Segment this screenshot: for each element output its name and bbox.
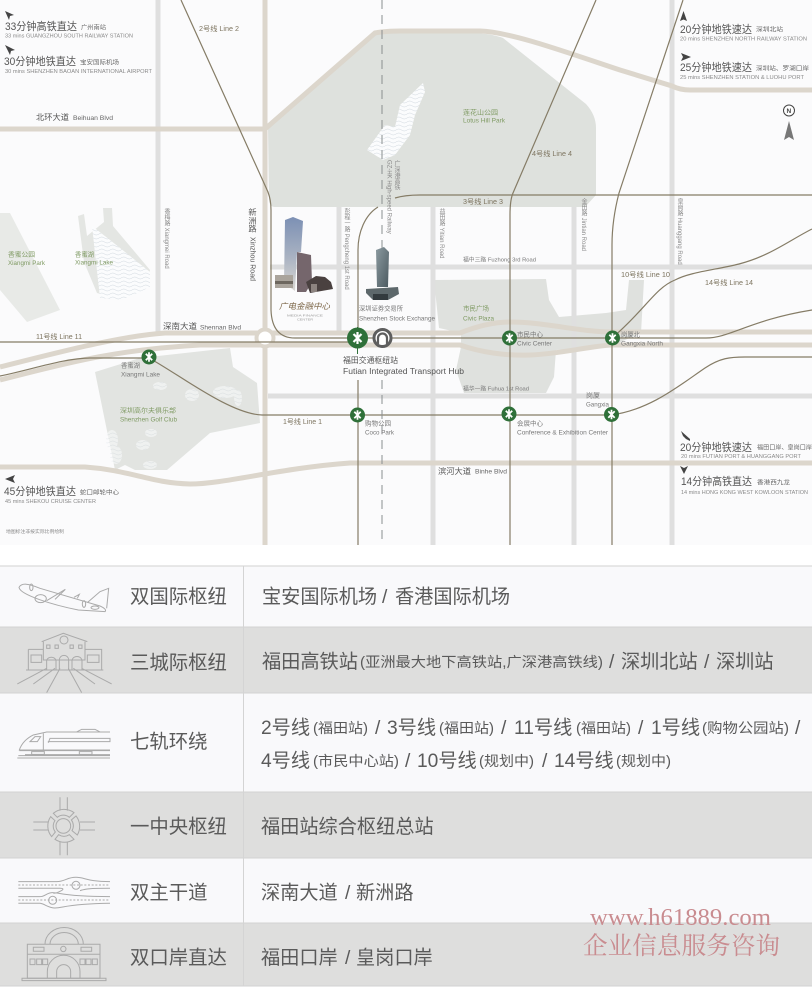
row value: metro lines: 10号线	[417, 750, 477, 772]
station labels	[121, 304, 664, 436]
park: Shenzhen Golf Club	[95, 348, 260, 470]
icon: port building	[22, 927, 106, 981]
water: Lotus Hill	[367, 83, 425, 160]
callout: Futian and Huanggang ports: 福田口岸、皇岗口岸	[757, 444, 812, 452]
callout: Hong Kong West Kowloon: 香港西九龙	[757, 478, 790, 486]
station labels: 市民中心	[517, 330, 544, 338]
row value: airports: 香港国际机场	[395, 586, 510, 608]
callout: Shenzhen North: 20分钟地铁速达	[680, 23, 752, 36]
station labels: Coco Park	[365, 430, 395, 436]
vertical road labels: 皇岗路 Huanggang Road	[676, 197, 683, 265]
road labels: 福中三路 Fuzhong 3rd Road	[463, 256, 536, 264]
hub label	[343, 355, 465, 376]
metro line labels: 1号线 Line 1	[283, 417, 322, 426]
water: Xiangmi Lake	[92, 226, 150, 300]
building label: Media Finance Center	[279, 302, 331, 322]
callout: Guangzhou South: 广州南站	[81, 24, 106, 32]
row value: metro lines: 3号线	[387, 717, 436, 739]
row label: three intercity hubs: 三城际枢纽	[130, 652, 227, 674]
high-speed railway dashed line	[381, 0, 383, 545]
callout: Guangzhou South: 33 mins GUANGZHOU SOUTH RAILWAY STATION	[5, 34, 133, 40]
row value: rail stations: 福田高铁站	[262, 651, 358, 673]
callout: Futian and Huanggang ports: 20 mins FUTIAN PORT & HUANGGANG PORT	[681, 454, 802, 460]
row value: metro lines: 2号线	[261, 717, 310, 739]
icon: railway station	[17, 633, 112, 693]
map disclaimer: 地图标注非按实际比例绘制	[6, 528, 64, 535]
row value: airports: 宝安国际机场	[262, 586, 377, 608]
row value: metro lines: 14号线	[554, 750, 614, 772]
row value: ports: /	[345, 948, 351, 969]
row value: arterial roads: 新洲路	[356, 882, 414, 904]
row value: metro lines: 1号线	[651, 717, 700, 739]
panel: transport table	[0, 566, 812, 986]
station labels: Gangxia	[586, 402, 609, 408]
park: Xiangmi	[0, 213, 60, 322]
row value: airports	[262, 586, 510, 608]
row value: metro lines: (福田站)	[439, 720, 494, 737]
station: Conference and Exhibition Center	[502, 406, 516, 422]
golf water spots	[106, 382, 242, 469]
callout: Shekou Cruise Center: 45分钟地铁直达	[4, 485, 76, 498]
row value: metro lines: (购物公园站)	[702, 720, 789, 737]
metro line labels: 3号线 Line 3	[463, 197, 503, 206]
park: Lotus Hill	[268, 33, 596, 207]
vertical road labels: Xinzhou Road	[248, 237, 256, 281]
station labels: 会展中心	[517, 418, 544, 428]
row value: rail stations: /	[704, 652, 710, 673]
row label: central hub: 一中央枢纽	[130, 816, 227, 838]
row value: ports	[261, 947, 433, 969]
callout: Shenzhen Station and Luohu: 25分钟地铁速达	[680, 61, 752, 74]
row label: dual international hubs: 双国际枢纽	[130, 586, 227, 608]
row value: metro lines: /	[795, 718, 801, 739]
park labels: Xiangmi Park	[8, 260, 46, 267]
station labels: Shenzhen Stock Exchange	[359, 316, 435, 322]
row value: metro lines: (规划中)	[479, 753, 534, 770]
vertical road labels: GZ-HK High-speed Railway	[386, 160, 392, 234]
icon: plane	[19, 584, 109, 612]
station labels: Civic Center	[517, 340, 552, 348]
park labels: 市民广场	[463, 304, 489, 312]
row value: metro lines: /	[638, 718, 644, 739]
row value: metro lines: 11号线	[514, 717, 572, 739]
callout: Shenzhen North: 深圳北站	[756, 26, 783, 34]
row value: central hub: 福田站综合枢纽总站	[261, 816, 434, 838]
row 3 background	[0, 693, 812, 792]
metro line labels: 2号线 Line 2	[199, 24, 239, 33]
station: Xiangmi Lake	[142, 350, 156, 364]
callout: Baoan Airport: 宝安国际机场	[80, 58, 119, 66]
row value: metro lines: /	[405, 751, 411, 772]
row value: rail stations: 深圳站	[716, 651, 774, 673]
station: Coco Park	[350, 408, 365, 422]
row value: rail stations: 深圳北站	[621, 651, 698, 673]
Shennan Blvd road	[0, 322, 812, 367]
station: Futian hub MTR	[347, 327, 368, 354]
road labels: Binhe Blvd	[475, 468, 508, 476]
row value: metro lines: /	[501, 718, 507, 739]
building label: Media Finance Center: 广电金融中心	[279, 302, 331, 311]
park labels: 深圳高尔夫俱乐部	[120, 406, 177, 414]
row label: dual arterial roads: 双主干道	[130, 882, 208, 904]
row value: arterial roads: 深南大道	[261, 882, 338, 904]
road labels	[36, 112, 536, 476]
row value: metro lines: (市民中心站)	[313, 753, 399, 770]
watermark: 企业信息服务咨询	[583, 932, 780, 960]
row value: arterial roads	[261, 882, 414, 904]
station labels: Conference & Exhibition Center	[517, 430, 608, 436]
icon: dual roads	[18, 877, 110, 908]
callout: Guangzhou South: 33分钟高铁直达	[5, 20, 77, 33]
station labels: 香蜜湖	[121, 360, 140, 370]
row 1 background	[0, 566, 812, 627]
icon: train	[17, 729, 110, 758]
row value: rail stations: (亚洲最大地下高铁站,广深港高铁线)	[360, 654, 603, 671]
hub label: Futian Integrated Transport Hub	[343, 367, 465, 376]
row label: dual ports: 双口岸直达	[130, 947, 227, 969]
vertical road labels: 广深港高铁	[393, 159, 400, 191]
metro line labels: 11号线 Line 11	[36, 332, 82, 341]
callout: Shekou Cruise Center	[4, 475, 119, 505]
row value: metro lines: /	[375, 718, 381, 739]
station: railway logo	[374, 330, 391, 346]
park labels: 莲花山公园	[463, 108, 498, 116]
vertical road labels: 彭程一路 Pengcheng 1st Road	[343, 207, 350, 290]
park: Civic Plaza	[434, 279, 644, 393]
callout: Hong Kong West Kowloon	[680, 466, 808, 496]
north compass: N	[786, 108, 792, 115]
row value: metro lines	[261, 717, 801, 772]
building label: Media Finance Center: MEDIA FINANCE	[287, 314, 323, 318]
Binhe Blvd road	[0, 463, 812, 484]
row value: rail stations	[262, 651, 774, 673]
grey roads	[158, 0, 812, 545]
callout: Shekou Cruise Center: 蛇口邮轮中心	[80, 488, 119, 496]
park labels	[8, 108, 506, 424]
callout: Hong Kong West Kowloon: 14分钟高铁直达	[681, 475, 752, 488]
station labels: 岗厦北	[621, 330, 641, 338]
vertical road labels: 香梅路 Xiangmei Road	[163, 207, 170, 269]
Xinzhou Road	[262, 0, 268, 545]
roundabout	[256, 330, 274, 346]
row label: seven rail lines: 七轨环绕	[130, 731, 208, 753]
building: Media Finance Center	[275, 217, 333, 293]
row value: metro lines: (福田站)	[313, 720, 368, 737]
callout: Baoan Airport: 30 mins SHENZHEN BAOAN INTERNATIONAL AIRPORT	[5, 69, 153, 75]
metro line labels: 14号线 Line 14	[705, 278, 753, 287]
road labels: 北环大道	[36, 112, 69, 122]
station: Civic Center	[502, 330, 517, 346]
Beihuan Blvd road	[0, 31, 812, 129]
callout: Baoan Airport	[4, 45, 153, 75]
row value: ports: 皇岗口岸	[356, 947, 433, 969]
park labels: Xiangmi Lake	[75, 260, 113, 266]
callout: Futian and Huanggang ports	[680, 431, 812, 460]
lake: Xiangmi	[78, 208, 150, 300]
row value: metro lines: /	[542, 751, 548, 772]
callout: Shenzhen North	[680, 11, 807, 42]
station labels: 购物公园	[365, 418, 391, 428]
park labels: 香蜜湖	[75, 250, 94, 258]
metro lines	[0, 0, 812, 545]
callout: Futian and Huanggang ports: 20分钟地铁速达	[680, 441, 752, 454]
park labels: 香蜜公园	[8, 250, 35, 258]
park labels: Civic Plaza	[463, 316, 494, 322]
row value: arterial roads: /	[345, 883, 351, 904]
callout: Hong Kong West Kowloon: 14 mins HONG KONG WEST KOWLOON STATION	[681, 490, 808, 496]
north compass	[784, 105, 794, 140]
metro line labels	[36, 24, 753, 426]
callout: Guangzhou South	[5, 11, 133, 40]
row value: rail stations: /	[609, 652, 615, 673]
hub label: 福田交通枢纽站	[343, 355, 398, 365]
callout: Shenzhen Station and Luohu	[680, 53, 809, 81]
vertical road labels: 益田路 Yitian Road	[438, 207, 445, 258]
road labels: 深南大道	[163, 321, 197, 331]
vertical road labels	[163, 159, 683, 290]
row value: metro lines: (规划中)	[616, 753, 671, 770]
vertical road labels: 新洲路	[248, 207, 257, 233]
building: Shenzhen Stock Exchange	[366, 247, 399, 300]
station: Gangxia	[604, 407, 619, 422]
building label: Media Finance Center: CENTER	[297, 318, 313, 322]
road labels: 福华一路 Fuhua 1st Road	[463, 384, 529, 392]
watermark	[583, 904, 780, 960]
station labels: Xiangmi Lake	[121, 372, 161, 378]
road labels: Shennan Blvd	[200, 324, 242, 332]
row 4 background	[0, 792, 812, 858]
callout: Baoan Airport: 30分钟地铁直达	[4, 55, 76, 68]
callout: Shenzhen Station and Luohu: 深圳站、罗湖口岸	[756, 64, 809, 72]
row value: ports: 福田口岸	[261, 947, 338, 969]
row 5 background	[0, 858, 812, 923]
station labels: 岗厦	[586, 392, 601, 400]
row value: airports: /	[382, 587, 388, 608]
metro line labels: 10号线 Line 10	[621, 270, 670, 279]
station: Gangxia North	[605, 330, 620, 346]
row value: metro lines: 4号线	[261, 750, 310, 772]
road labels: Beihuan Blvd	[73, 115, 114, 122]
callout: Shenzhen Station and Luohu: 25 mins SHENZHEN STATION & LUOHU PORT	[680, 75, 805, 81]
row 6 background	[0, 923, 812, 986]
park labels: Shenzhen Golf Club	[120, 416, 177, 424]
icon: roundabout	[33, 797, 95, 855]
row value: metro lines: (福田站)	[576, 720, 631, 737]
map panel	[0, 0, 812, 545]
metro line labels: 4号线 Line 4	[532, 149, 572, 158]
station labels: 深圳证券交易所	[359, 304, 404, 312]
station labels: Gangxia North	[621, 340, 664, 348]
callout: Shenzhen North: 20 mins SHENZHEN NORTH RAILWAY STATION	[680, 36, 807, 42]
row 2 background	[0, 627, 812, 693]
road labels: 滨河大道	[438, 466, 471, 476]
callout: Shekou Cruise Center: 45 mins SHEKOU CRUISE CENTER	[5, 499, 96, 505]
vertical road labels: 金田路 Jintian Road	[580, 197, 587, 251]
park labels: Lotus Hill Park	[463, 118, 506, 124]
watermark: www.h61889.com	[590, 904, 771, 931]
